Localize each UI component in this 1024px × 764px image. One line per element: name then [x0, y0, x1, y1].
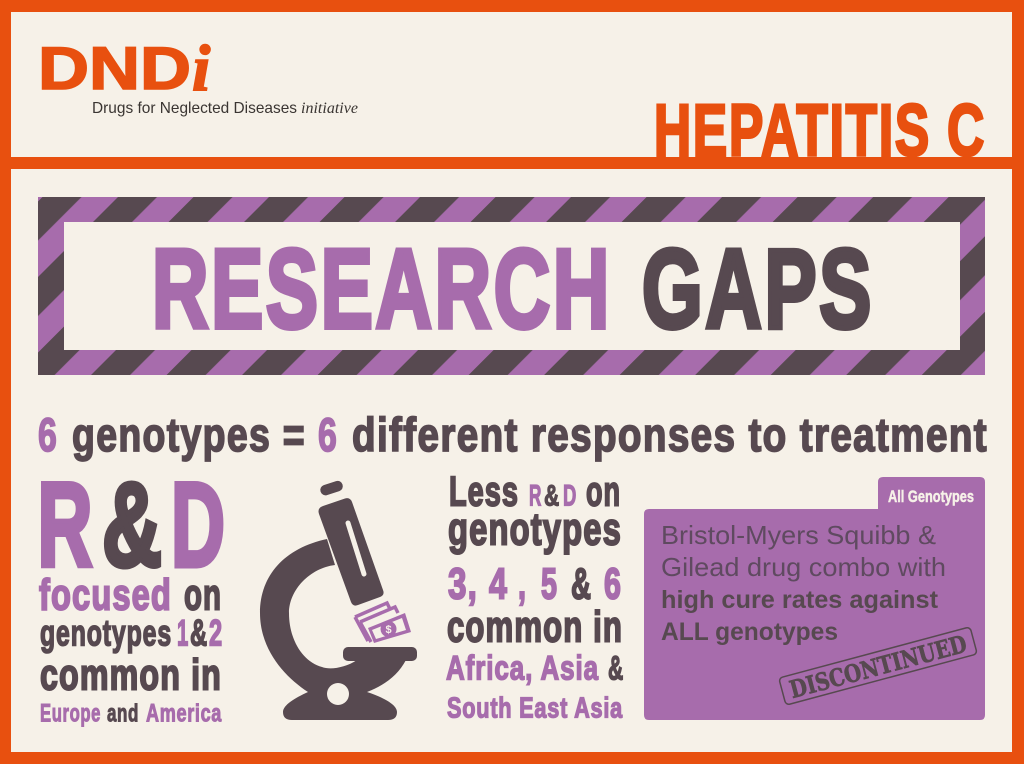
logo tagline: initiative [301, 100, 358, 117]
panel body text [661, 520, 946, 646]
subheading: 6 genotypes = 6 different responses [38, 408, 988, 461]
panel body text: Gilead drug combo with [661, 552, 946, 582]
Africa, Asia &: & [608, 650, 624, 688]
logo: DNDi: i [192, 32, 211, 105]
icon: microscope with money [260, 480, 417, 720]
panel: all genotypes [644, 477, 985, 720]
title: Research Gaps: RESEARCH [152, 226, 612, 352]
focused on: on [184, 570, 222, 620]
icon: banknotes: $ [385, 624, 392, 636]
focused on: focused [39, 570, 172, 620]
subheading: 6 genotypes = 6 different responses: 6 [38, 408, 58, 461]
logo tagline: Drugs for Neglected Diseases [92, 100, 297, 117]
microscope tube [318, 498, 384, 606]
subheading: 6 genotypes = 6 different responses: genotypes = [72, 408, 306, 461]
panel body text: ALL genotypes [661, 618, 838, 646]
3, 4, 5 & 6: 4 [489, 560, 508, 608]
stamp: discontinued: DISCONTINUED [786, 629, 970, 704]
3, 4, 5 & 6: 3, [448, 560, 478, 608]
common in: common in [40, 650, 222, 700]
3, 4, 5 & 6 [448, 560, 622, 608]
R&D large text: & [102, 458, 162, 592]
Europe and America: and [107, 700, 139, 728]
Less R&D on: & [544, 480, 560, 512]
R&D large text: D [171, 458, 225, 592]
R&D large text: R [38, 458, 92, 592]
logo: DNDi: DND [38, 35, 191, 102]
subheading: 6 genotypes = 6 different responses: 6 [318, 408, 338, 461]
common in: common in [447, 602, 623, 652]
microscope eyepiece [319, 480, 344, 497]
Less R&D on: D [563, 480, 577, 512]
Europe and America: Europe [40, 700, 101, 728]
genotypes 1&2: 1 [177, 612, 189, 654]
panel body text: Bristol-Myers Squibb & [661, 520, 936, 550]
logo: DNDi [38, 32, 211, 105]
tab label: All Genotypes [888, 487, 974, 506]
genotypes 1&2: genotypes [40, 612, 172, 654]
Europe and America [40, 700, 222, 728]
Europe and America: America [146, 700, 222, 728]
R&D large text [38, 458, 225, 592]
microscope arm and base [260, 539, 406, 720]
Less R&D on: on [586, 468, 621, 514]
Less R&D on [449, 468, 621, 514]
Less R&D on: Less [449, 468, 519, 514]
microscope stage [343, 647, 417, 661]
hazard-striped title frame [38, 197, 985, 375]
panel background with tab [644, 477, 985, 720]
3, 4, 5 & 6: 5 [541, 560, 558, 608]
3, 4, 5 & 6: & [571, 560, 592, 608]
title: Research Gaps: GAPS [642, 226, 874, 352]
Africa, Asia &: Africa, Asia [446, 650, 599, 688]
3, 4, 5 & 6: , [518, 560, 527, 608]
middle column: less R&D [446, 468, 624, 724]
genotypes: genotypes [448, 504, 622, 554]
microscope slot [348, 523, 364, 574]
microscope base hole [327, 683, 349, 705]
Less R&D on: R [529, 480, 542, 512]
icon: banknotes [355, 603, 411, 643]
genotypes 1&2: 2 [209, 612, 223, 654]
South East Asia: South East Asia [447, 692, 623, 724]
panel body text: high cure rates against [661, 586, 939, 614]
3, 4, 5 & 6: 6 [604, 560, 622, 608]
left column: R&D focus [38, 458, 225, 728]
genotypes 1&2: & [190, 612, 208, 654]
